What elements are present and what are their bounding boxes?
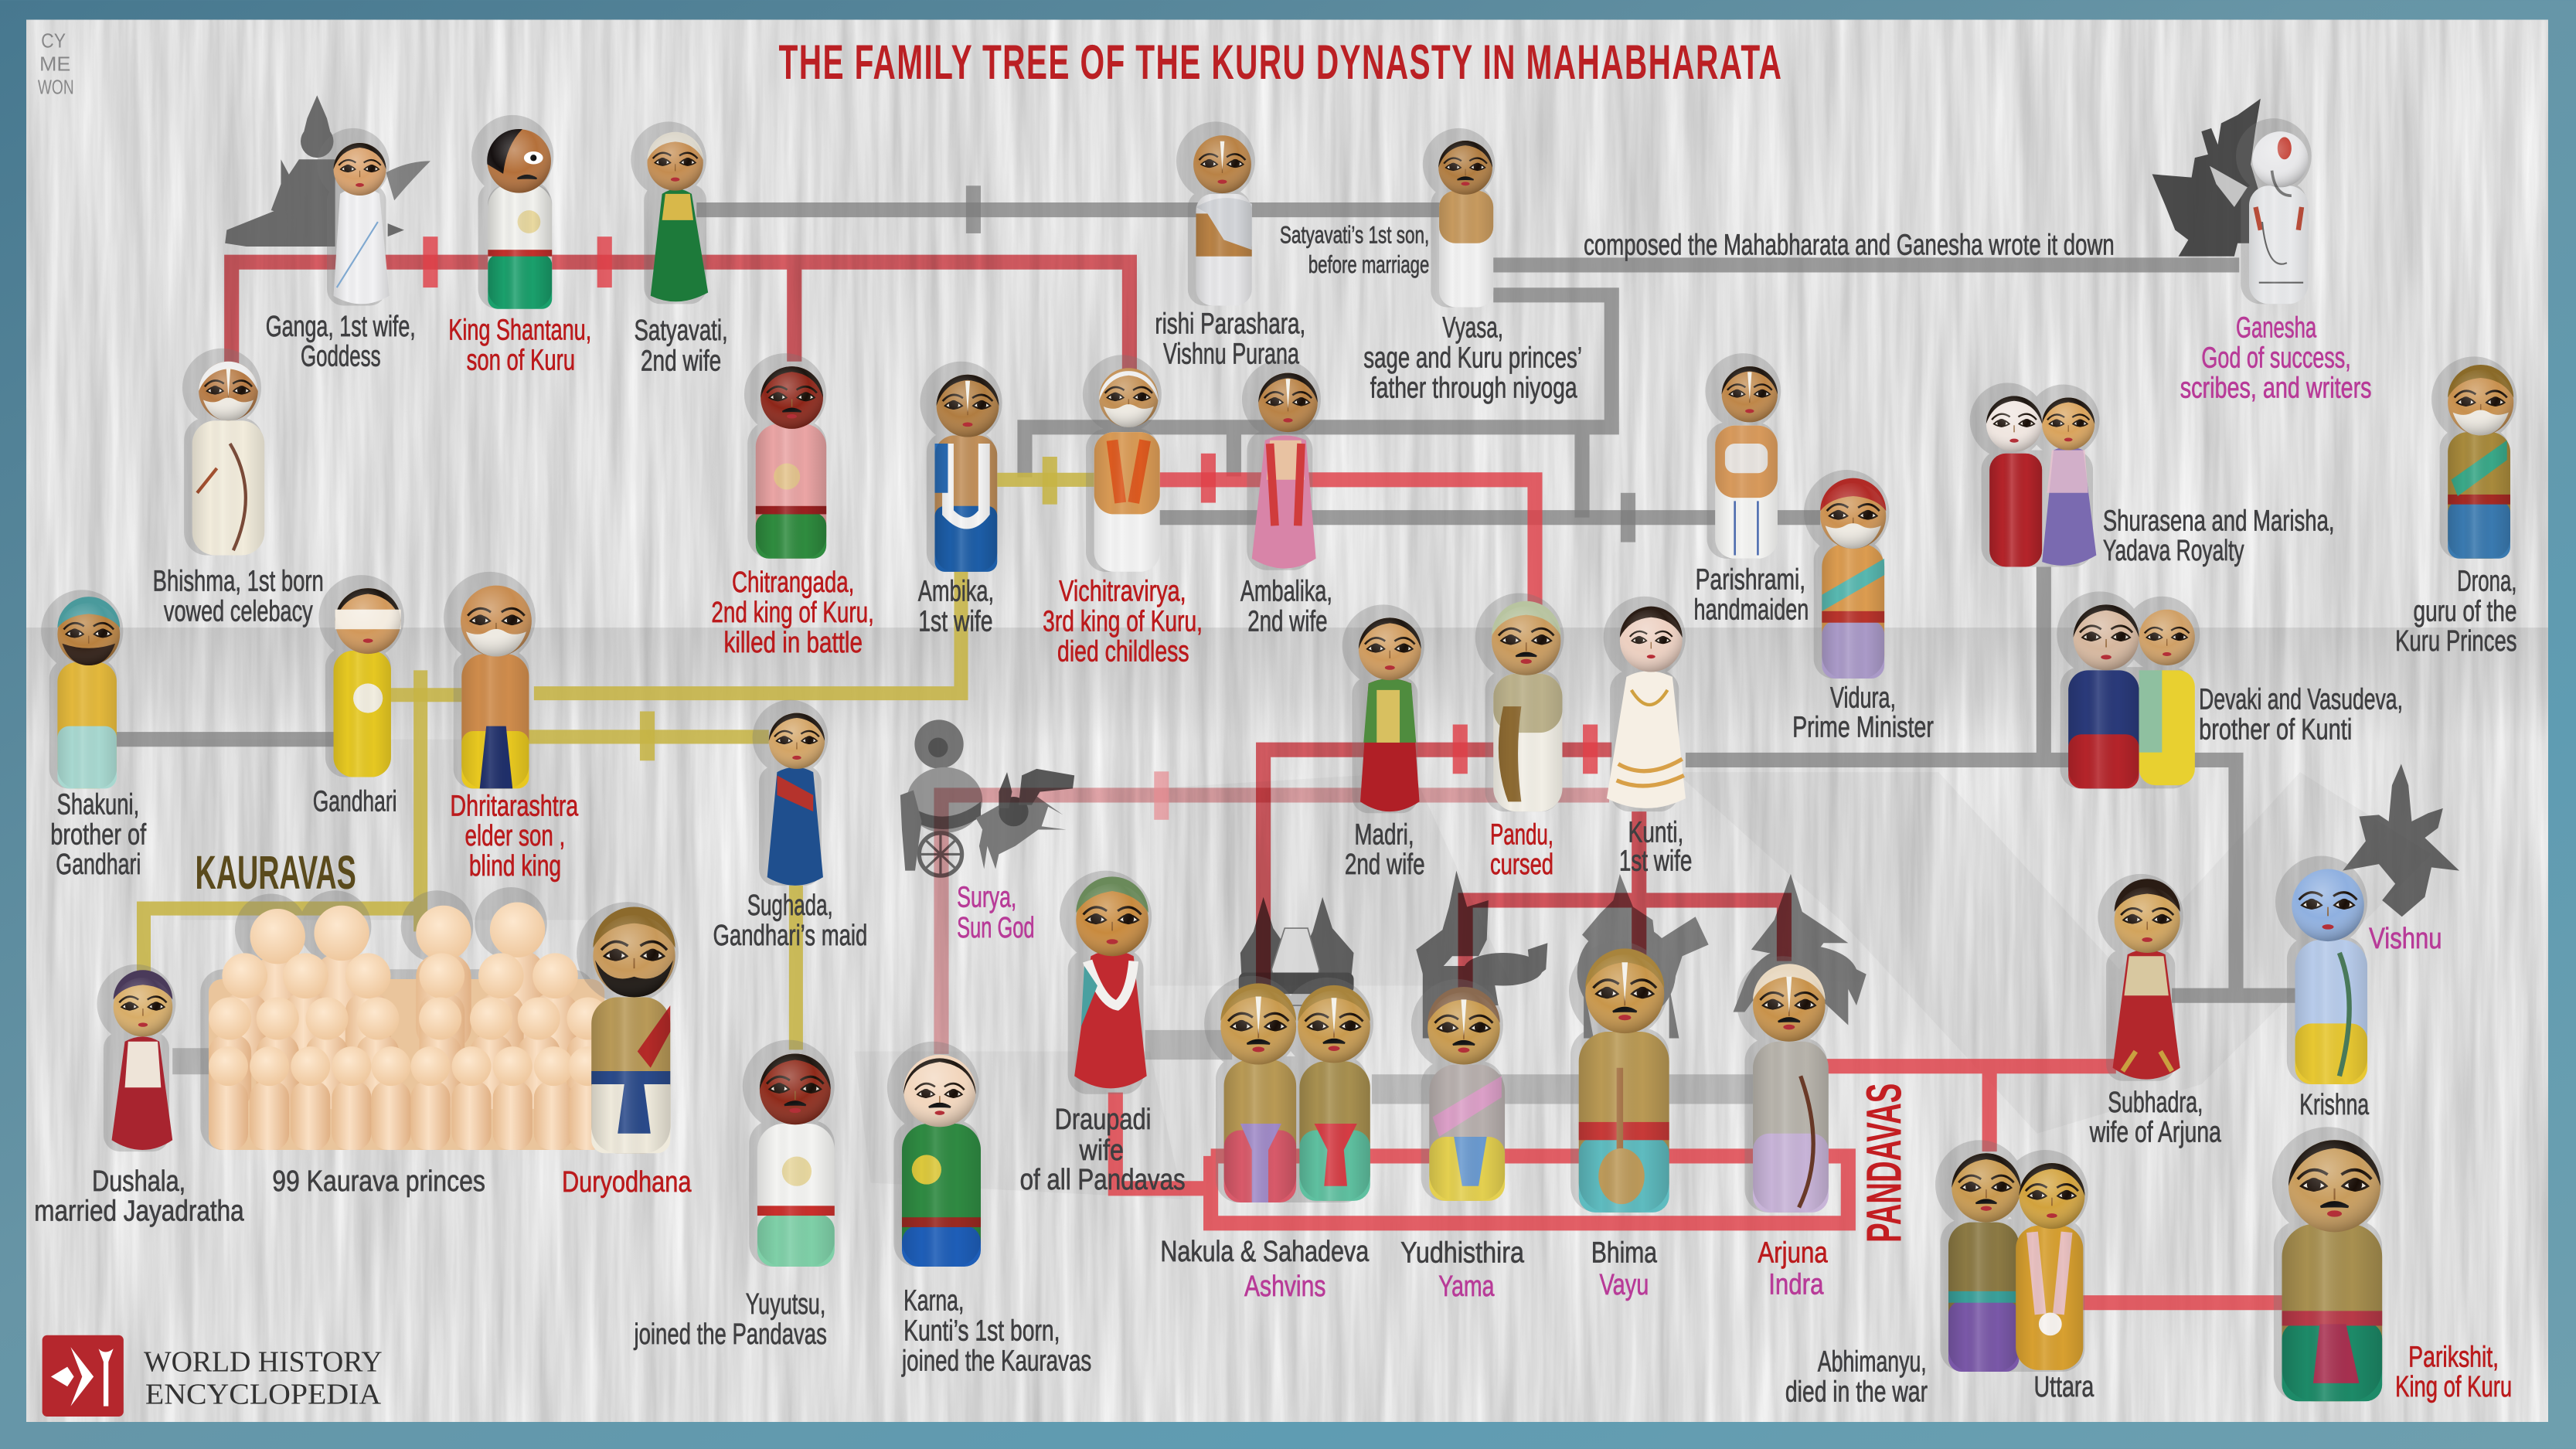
label: Draupadi: Draupadi <box>1055 1103 1151 1136</box>
label: Parishrami: handmaiden <box>1694 593 1809 626</box>
connector: Draupadi to Pandavas gray <box>1145 1045 1753 1089</box>
tick: Kunti <box>1583 725 1598 774</box>
label: Ambalika: Ambalika, <box>1240 575 1332 608</box>
label: Ambalika: 2nd wife <box>1247 604 1328 638</box>
tick: Ambalika <box>1201 454 1216 503</box>
label: Ganga: Goddess <box>301 340 381 373</box>
label: Ganesha <box>2180 311 2372 404</box>
label: Satyavati: Satyavati, <box>634 314 728 347</box>
label: Satyavati's first son: before marriage <box>1308 250 1429 278</box>
heading: Kauravas: KAURAVAS <box>196 846 356 900</box>
silhouette: Indra on elephant <box>1734 874 1866 1025</box>
label: King Shantanu: son of Kuru <box>467 343 575 376</box>
label: Abhimanyu <box>1785 1345 1928 1408</box>
signature mark <box>38 31 74 98</box>
label: Kunti: Kunti, <box>1628 815 1683 849</box>
label: Ganga <box>266 310 416 373</box>
label: composed note: composed the Mahabharata and Ganesha wrote it down <box>1584 229 2115 262</box>
label: Dushala: Dushala, <box>92 1165 185 1198</box>
label: Kunti <box>1619 815 1692 878</box>
label: Arjuna <box>1758 1236 1828 1301</box>
label: Dhritarashtra: Dhritarashtra <box>450 789 579 822</box>
label: Shurasena and Marisha <box>2103 505 2335 567</box>
label: Bhima: Bhima <box>1591 1236 1657 1270</box>
label: Dushala <box>34 1165 244 1227</box>
silhouette: Vayu <box>1577 874 1709 1038</box>
label: Devaki and Vasudeva <box>2199 682 2403 747</box>
label: 99 Kaurava princes: 99 Kaurava princes <box>272 1165 485 1198</box>
label: Pandu: Pandu, <box>1490 818 1553 852</box>
label: Krishna: Krishna <box>2299 1088 2370 1121</box>
label: Karna: Karna, <box>903 1284 964 1318</box>
connector: Kaurava princes to Dushala <box>172 1055 210 1067</box>
label: Ambika: 1st wife <box>918 604 993 638</box>
doll: Yuyutsu <box>743 1040 835 1267</box>
label: Dhritarashtra <box>450 789 579 883</box>
title: THE FAMILY TREE OF THE KURU DYNASTY IN MAHABHARATA <box>779 36 1782 90</box>
label: Vyasa: Vyasa, <box>1442 311 1503 344</box>
label: rishi Parashara <box>1155 308 1305 371</box>
doll: Ganga <box>317 128 390 305</box>
doll: Parishrami <box>1705 353 1781 559</box>
label: Pandu: cursed <box>1490 848 1553 881</box>
label: Subhadra: wife of Arjuna <box>2089 1115 2221 1148</box>
label: Kunti: 1st wife <box>1619 845 1692 878</box>
doll: Ambalika <box>1242 360 1321 570</box>
dolls: Nakula and Sahadeva <box>1204 976 1373 1202</box>
label: Vidura: Prime Minister <box>1792 710 1934 743</box>
label: Bhima: Vayu <box>1600 1268 1649 1301</box>
label: Bhishma: Bhishma, 1st born <box>153 564 324 597</box>
label: Shurasena and Marisha: Yadava Royalty <box>2103 534 2244 567</box>
label: Ambika <box>918 575 994 638</box>
doll: Duryodhana <box>577 902 679 1153</box>
label: Vyasa: sage and Kuru princes’ <box>1363 341 1582 374</box>
tick: Ambika <box>1043 457 1057 505</box>
label: Draupadi <box>1020 1103 1186 1196</box>
label: Nakula and Sahadeva: Ashvins <box>1244 1270 1325 1303</box>
doll: rishi Parashara <box>1176 121 1255 305</box>
label: Vidura: Vidura, <box>1830 681 1896 714</box>
label: Yudhisthira <box>1400 1236 1525 1303</box>
label: Chitrangada: Chitrangada, <box>732 566 854 599</box>
doll: Bhima <box>1569 941 1669 1213</box>
silhouette: Ganga goddess <box>225 95 430 247</box>
doll: Karna <box>887 1042 981 1267</box>
label: King Shantanu: King Shantanu, <box>448 313 591 346</box>
label: Sughada <box>713 889 867 952</box>
connector: Ambika and Vichitravirya <box>997 477 1094 483</box>
marriage tick: Satyavati <box>597 236 612 287</box>
label: Ambalika <box>1240 575 1332 638</box>
dolls: Abhimanyu and Uttara <box>1935 1140 2088 1372</box>
label: Surya: Sun God <box>957 911 1035 944</box>
label: Nakula and Sahadeva: Nakula & Sahadeva <box>1160 1235 1370 1268</box>
label: Subhadra <box>2089 1086 2221 1148</box>
label: Vichitravirya: died childless <box>1057 634 1189 668</box>
label: Drona: Drona, <box>2457 564 2516 597</box>
doll: Sughada <box>753 700 828 886</box>
label: Devaki and Vasudeva: Devaki and Vasudeva, <box>2199 682 2403 716</box>
label: Parishrami <box>1694 563 1809 626</box>
label: Uttara: Uttara <box>2034 1370 2094 1403</box>
signature mark: WON <box>38 77 74 98</box>
doll: Drona <box>2431 356 2516 559</box>
doll: Krishna <box>2275 856 2367 1084</box>
silhouette: Surya chariot <box>900 719 1074 876</box>
label: Shakuni <box>50 787 146 881</box>
connector: Arjuna to Subhadra and Abhimanyu <box>1809 1066 2116 1151</box>
doll: Madri <box>1342 604 1424 813</box>
label: Devaki and Vasudeva: brother of Kunti <box>2199 713 2352 747</box>
connector: Shantanu family line <box>232 262 1129 371</box>
label: Vichitravirya: 3rd king of Kuru, <box>1043 604 1203 638</box>
label: Abhimanyu: Abhimanyu, <box>1818 1345 1927 1379</box>
connector: Abhimanyu and Uttara to Parikshit <box>2083 1299 2284 1306</box>
silhouette: Vishnu <box>2343 764 2459 917</box>
label: Satyavati's first son <box>1280 221 1429 278</box>
label: Ganesha: scribes, and writers <box>2180 371 2372 404</box>
doll: Vyasa <box>1423 128 1495 308</box>
doll: Devaki and Vasudeva <box>2057 591 2200 788</box>
label: Shakuni: brother of <box>50 818 146 852</box>
connector: Parishrami to Vidura line <box>1159 514 1820 521</box>
doll: Vichitravirya <box>1083 355 1162 572</box>
connector: Shakuni to Gandhari <box>117 736 337 743</box>
connector: Sughada to Yuyutsu <box>793 886 799 1049</box>
label: King Shantanu <box>448 313 591 376</box>
label: Drona <box>2395 564 2516 658</box>
connector: Vyasa to Ganesha <box>1492 261 2239 268</box>
label: Satyavati: 2nd wife <box>641 345 721 378</box>
doll: Ambika <box>920 362 1002 572</box>
connector: Vichitravirya to Pandu <box>1159 480 1535 607</box>
connector: Surya to Kunti and Karna <box>941 795 1609 1054</box>
doll: Parikshit <box>2272 1127 2384 1401</box>
connector: Dhritarashtra to Kauravas <box>144 670 420 976</box>
doll: Arjuna <box>1737 956 1829 1213</box>
tick: Sughada <box>640 711 655 760</box>
marriage tick: Ganga <box>423 236 437 287</box>
label: Pandu <box>1490 818 1553 881</box>
label: Ganga: Ganga, 1st wife, <box>266 310 416 343</box>
label: Ganesha: God of success, <box>2201 341 2351 374</box>
label: Karna: Kunti’s 1st born, <box>903 1315 1060 1348</box>
label: Subhadra: Subhadra, <box>2108 1086 2203 1119</box>
silhouette: Yama on buffalo <box>1416 871 1547 1038</box>
label: Shakuni: Gandhari <box>56 848 141 881</box>
connector: Draupadi to Pandavas red <box>1115 1093 1848 1223</box>
label: Dhritarashtra: elder son , <box>465 819 565 852</box>
logo: World History Encyclopedia <box>43 1335 383 1417</box>
label: Vidura <box>1792 681 1934 743</box>
label: Madri: Madri, <box>1354 818 1414 852</box>
label: Parikshit <box>2395 1341 2512 1403</box>
faint background shapes <box>181 740 2431 1199</box>
label: Satyavati's first son: Satyavati’s 1st son, <box>1280 221 1429 249</box>
connector: Kunti to Pandavas <box>1465 811 1784 1023</box>
label: Bhishma <box>153 564 324 628</box>
doll: Dhritarashtra <box>444 572 536 788</box>
label: Ambika: Ambika, <box>918 575 994 608</box>
label: Yuyutsu: Yuyutsu, <box>746 1287 825 1321</box>
label: Parishrami: Parishrami, <box>1696 563 1805 597</box>
label: Arjuna: Arjuna <box>1758 1236 1828 1270</box>
doll: Kunti <box>1604 597 1686 811</box>
label: Draupadi: wife <box>1079 1134 1124 1167</box>
label: rishi Parashara: Vishnu Purana <box>1163 338 1299 371</box>
logo: World History Encyclopedia: ENCYCLOPEDIA <box>145 1379 382 1411</box>
label: Yuyutsu: joined the Pandavas <box>634 1318 827 1351</box>
label: Parikshit: King of Kuru <box>2395 1370 2512 1403</box>
doll: Satyavati <box>631 121 708 304</box>
label: Chitrangada: killed in battle <box>724 626 863 659</box>
label: Sughada: Sughada, <box>747 889 833 922</box>
label: Yudhisthira: Yama <box>1438 1270 1495 1303</box>
label: Vishnu: Vishnu <box>2369 922 2442 955</box>
label: Yudhisthira: Yudhisthira <box>1400 1236 1525 1270</box>
label: Arjuna: Indra <box>1768 1267 1824 1301</box>
label: Dushala: married Jayadratha <box>34 1194 244 1227</box>
label: Drona: Kuru Princes <box>2395 624 2516 658</box>
horizontal shaded band <box>26 628 2548 743</box>
group: 99 Kaurava princes <box>200 887 610 1150</box>
label: rishi Parashara: rishi Parashara, <box>1155 308 1305 341</box>
label: Drona: guru of the <box>2414 595 2516 628</box>
label: Madri <box>1345 818 1425 881</box>
label: Gandhari: Gandhari <box>313 784 397 818</box>
label: Vichitravirya: Vichitravirya, <box>1059 575 1186 608</box>
doll: Vidura <box>1804 470 1889 679</box>
label: Draupadi: of all Pandavas <box>1020 1163 1186 1196</box>
connector: Satyavati to Parashara to Vyasa <box>696 206 1441 213</box>
label: Madri: 2nd wife <box>1345 848 1425 881</box>
logo: World History Encyclopedia: WORLD HISTORY <box>144 1346 383 1379</box>
doll: Bhishma <box>182 349 264 556</box>
label: Shakuni: Shakuni, <box>57 787 139 821</box>
signature mark: CY <box>41 31 66 53</box>
label: Karna <box>901 1284 1091 1377</box>
label: Shurasena and Marisha: Shurasena and Marisha, <box>2103 505 2335 538</box>
label: Ganesha: Ganesha <box>2236 311 2317 344</box>
doll: Chitrangada <box>744 353 826 559</box>
label: Duryodhana: Duryodhana <box>562 1165 692 1199</box>
doll: Shakuni <box>41 590 123 788</box>
tick: Madri <box>1453 725 1468 774</box>
silhouette: Ganesha <box>2152 99 2261 257</box>
tick: Surya <box>1154 771 1169 820</box>
label: Karna: joined the Kauravas <box>901 1344 1091 1377</box>
label: Nakula and Sahadeva <box>1160 1235 1370 1303</box>
doll: Pandu <box>1475 593 1564 811</box>
label: Chitrangada: 2nd king of Kuru, <box>711 596 874 629</box>
label: Vyasa <box>1363 311 1582 404</box>
connector: Pandu to Madri and Nakula <box>1264 750 1611 992</box>
label: Chitrangada <box>711 566 874 659</box>
label: Bhima <box>1591 1236 1657 1301</box>
label: Vyasa: father through niyoga <box>1370 371 1577 404</box>
heading: Pandavas: PANDAVAS <box>1856 1083 1911 1243</box>
doll: Gandhari <box>318 575 404 777</box>
connector: Dhritarashtra to Sughada <box>529 733 769 740</box>
label: Vichitravirya <box>1043 575 1203 668</box>
label: Sughada: Gandhari’s maid <box>713 919 867 952</box>
signature mark: ME <box>39 53 70 75</box>
label: Dhritarashtra: blind king <box>469 849 561 883</box>
doll: Dushala <box>97 964 175 1151</box>
silhouette: Ashvins <box>1239 897 1354 1005</box>
label: Satyavati <box>634 314 728 378</box>
doll: King Shantanu <box>471 115 553 309</box>
doll: Subhadra <box>2098 874 2183 1081</box>
label: Surya <box>957 880 1035 944</box>
label: Bhishma: vowed celebacy <box>164 595 313 628</box>
connector: Vyasa to sons <box>1025 295 1611 518</box>
doll: Ganesha <box>2236 118 2312 304</box>
connector: Shurasena to Kunti and Krishna <box>1686 566 2295 995</box>
label: Surya: Surya, <box>957 880 1016 913</box>
label: Abhimanyu: died in the war <box>1785 1375 1928 1408</box>
tick: Parashara <box>966 185 981 233</box>
tick: Parishrami <box>1621 493 1635 543</box>
connector: Ambika to Dhritarashtra <box>391 572 961 695</box>
doll: Yudhisthira <box>1411 979 1505 1201</box>
label: Parikshit: Parikshit, <box>2408 1341 2499 1374</box>
doll: Draupadi <box>1060 871 1152 1094</box>
doll: Shurasena and Marisha <box>1970 383 2100 566</box>
label: Yuyutsu <box>634 1287 827 1351</box>
